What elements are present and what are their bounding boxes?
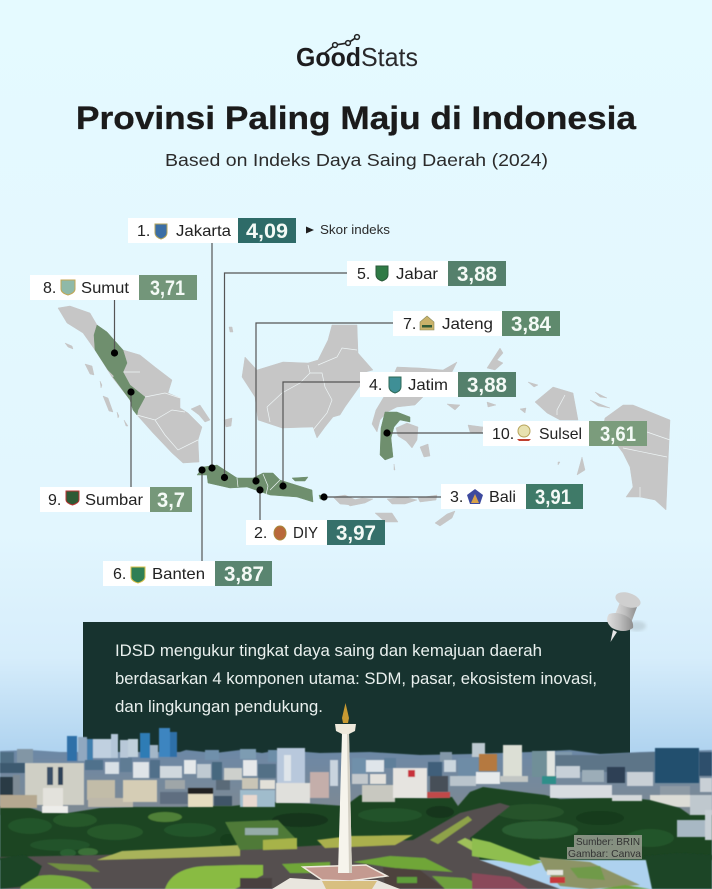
label: 1 Jakarta 4,09 — [128, 218, 296, 243]
connector lines and location dots — [111, 243, 483, 561]
Monas monument — [272, 703, 400, 889]
label: 6 Banten 3,87: 3,87 — [224, 562, 264, 586]
label: 4 Jatim 3,88: 3,88 — [467, 373, 507, 397]
panel text — [115, 642, 597, 716]
icon: push pin — [607, 589, 646, 642]
label: 6 Banten 3,87 — [103, 561, 272, 586]
island: Sumatra — [58, 306, 232, 463]
label: 10 Sulsel 3,61: Sulsel — [539, 426, 582, 443]
panel text: dan lingkungan pendukung. — [115, 698, 323, 716]
label: 7 Jateng 3,84: 3,84 — [511, 312, 551, 336]
panel text: berdasarkan 4 komponen utama: SDM, pasar, ekosistem inovasi, — [115, 670, 597, 688]
label: 2 DIY 3,97: DIY — [293, 525, 318, 542]
label: 9 Sumbar 3,7: 9. — [48, 492, 61, 509]
legend: Skor indeks: Skor indeks — [320, 223, 390, 237]
label: 10 Sulsel 3,61 — [483, 421, 647, 446]
label: 5 Jabar 3,88: Jabar — [396, 266, 439, 283]
panel text: IDSD mengukur tingkat daya saing dan kemajuan daerah — [115, 642, 542, 660]
title: Provinsi Paling Maju di Indonesia — [76, 100, 636, 136]
source note: Gambar: Canva — [568, 848, 641, 860]
island: Papua — [603, 405, 670, 510]
label: 1 Jakarta 4,09: 4,09 — [246, 219, 288, 243]
label: 10 Sulsel 3,61: 3,61 — [600, 422, 636, 446]
panel: explanation — [83, 622, 630, 758]
city buildings — [0, 745, 712, 840]
islands: Nusa Tenggara — [319, 495, 455, 526]
label: 2 DIY 3,97: 2. — [254, 525, 267, 542]
label: 8 Sumut 3,71: 8. — [43, 280, 56, 297]
label: 8 Sumut 3,71 — [30, 275, 197, 300]
label: 1 Jakarta 4,09: 1. — [137, 223, 150, 240]
label: 9 Sumbar 3,7 — [40, 487, 192, 512]
label: 7 Jateng 3,84: Jateng — [442, 316, 493, 333]
label: 10 Sulsel 3,61: 10. — [492, 426, 514, 443]
logo: GoodStats: Stats — [361, 42, 418, 72]
islands: Maluku — [447, 348, 610, 475]
logo: GoodStats: Good — [296, 42, 361, 72]
label: 1 Jakarta 4,09: Jakarta — [176, 223, 231, 240]
label: 8 Sumut 3,71: Sumut — [81, 280, 130, 297]
label: 7 Jateng 3,84: 7. — [403, 316, 416, 333]
label: 5 Jabar 3,88: 5. — [357, 266, 370, 283]
island: Kalimantan — [229, 325, 373, 438]
label: 8 Sumut 3,71: 3,71 — [150, 276, 185, 300]
label: 2 DIY 3,97 — [246, 520, 385, 545]
label: 3 Bali 3,91: Bali — [489, 489, 516, 506]
island: Java — [197, 465, 313, 502]
source note: Sumber: BRIN — [576, 836, 640, 848]
park and roads — [0, 803, 712, 889]
label: 4 Jatim 3,88: 4. — [369, 377, 382, 394]
label: 2 DIY 3,97: 3,97 — [336, 521, 376, 545]
label: 4 Jatim 3,88 — [360, 372, 516, 397]
label: 9 Sumbar 3,7: Sumbar — [85, 492, 144, 509]
island: Sulawesi — [372, 362, 457, 470]
label: 5 Jabar 3,88 — [347, 261, 506, 286]
label: 3 Bali 3,91 — [441, 484, 583, 509]
source note — [567, 835, 642, 860]
logo: GoodStats — [296, 35, 418, 72]
province: Sumut — [94, 325, 127, 377]
mid-distance city texture — [0, 758, 712, 817]
label: 3 Bali 3,91: 3,91 — [535, 485, 571, 509]
label: 3 Bali 3,91: 3. — [450, 489, 463, 506]
trees — [0, 787, 712, 860]
subtitle: Based on Indeks Daya Saing Daerah (2024) — [165, 150, 548, 170]
province: Sumbar — [113, 372, 145, 415]
label: 6 Banten 3,87: 6. — [113, 566, 126, 583]
photo: Jakarta skyline with Monas — [0, 703, 712, 889]
label: 6 Banten 3,87: Banten — [152, 566, 205, 583]
label: 9 Sumbar 3,7: 3,7 — [157, 488, 185, 512]
label: 5 Jabar 3,88: 3,88 — [457, 262, 497, 286]
map of Indonesia — [58, 306, 670, 526]
label: 7 Jateng 3,84 — [393, 311, 560, 336]
label: 4 Jatim 3,88: Jatim — [408, 377, 448, 394]
far skyline — [0, 728, 712, 815]
